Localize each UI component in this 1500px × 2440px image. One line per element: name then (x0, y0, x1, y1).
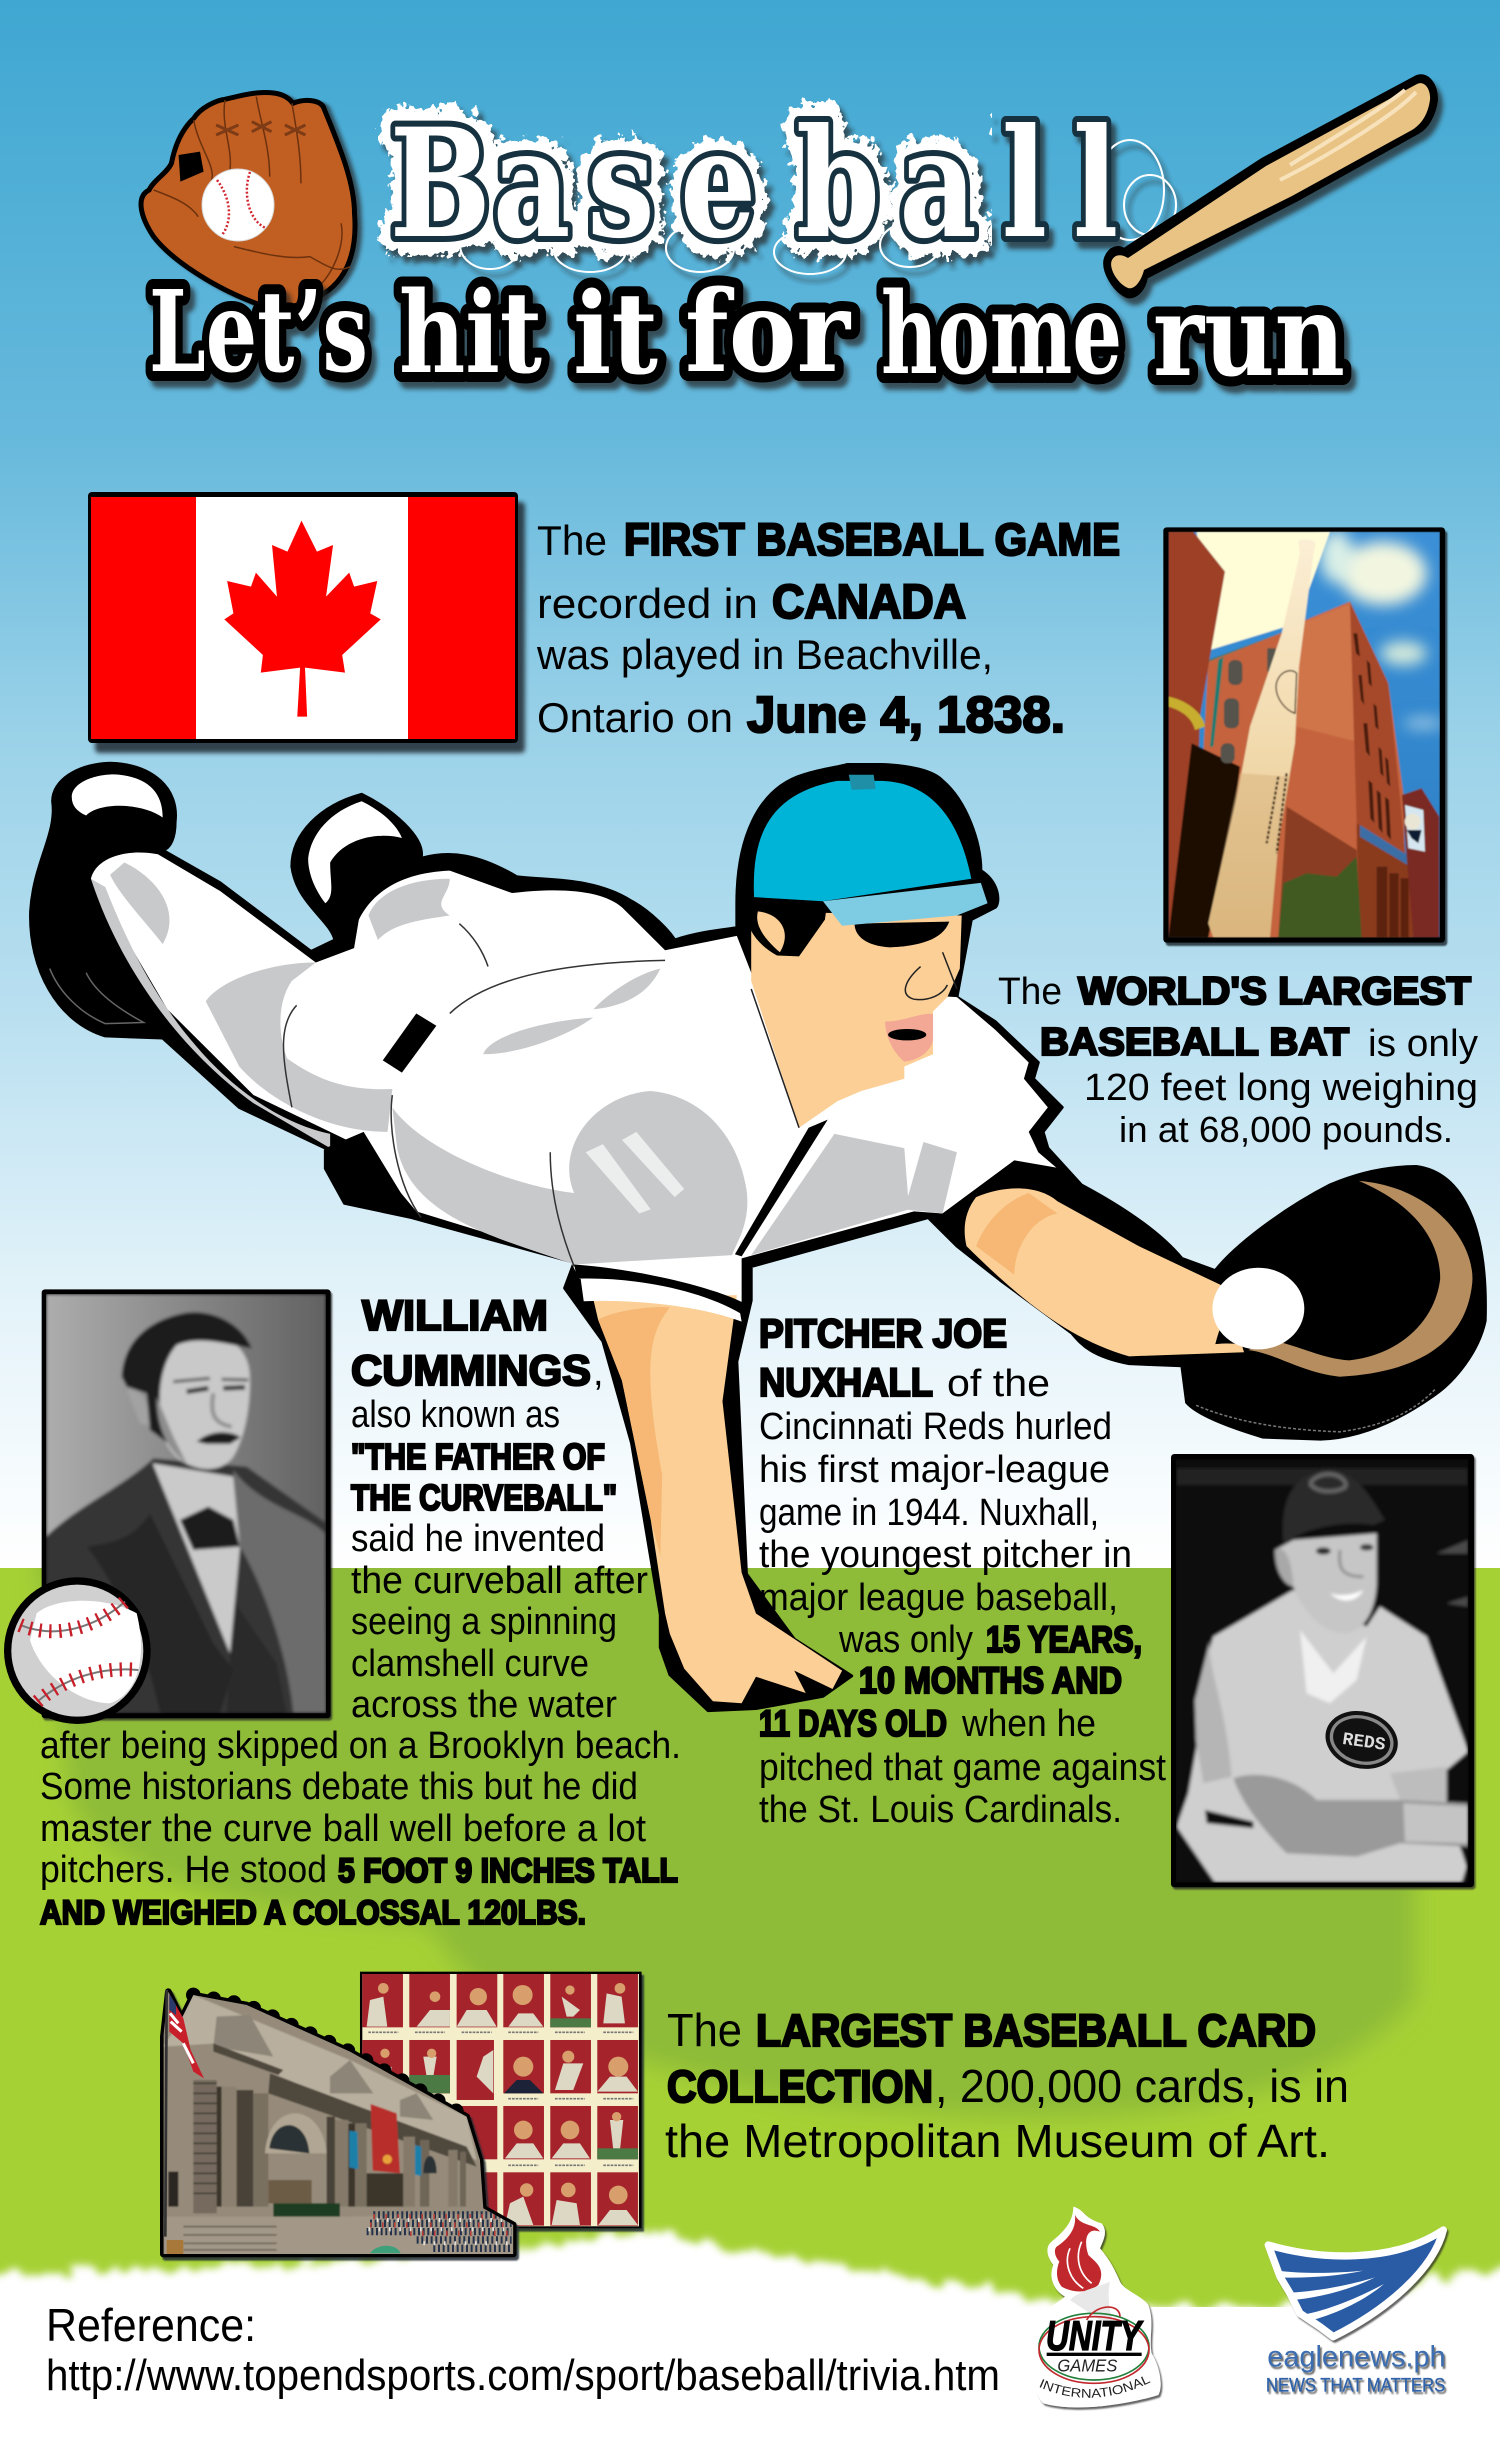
text block: Joe Nuxhall: the St. Louis Cardinals. (759, 1789, 1122, 1831)
subtitle: Let's hit it for home run: hit (399, 268, 542, 399)
text block: world's largest bat: in at 68,000 pounds. (1119, 1109, 1453, 1150)
text block: Joe Nuxhall: of the (947, 1363, 1050, 1405)
text block: William Cummings (40, 1292, 681, 1932)
arm (1233, 1775, 1468, 1857)
text block: William Cummings: Some historians debate this but he did (40, 1766, 638, 1808)
reference: http://www.topendsports.com/sport/baseball/trivia.htm (46, 2351, 1000, 2400)
text block: world's largest bat: 120 feet long weighing (1084, 1067, 1478, 1109)
text block: Joe Nuxhall: NUXHALL (759, 1361, 933, 1405)
text block: Joe Nuxhall: Cincinnati Reds hurled (759, 1406, 1112, 1448)
text block: first baseball game in Canada: The (537, 517, 607, 564)
text block: world's largest bat: BASEBALL BAT (1040, 1021, 1349, 1064)
text block: William Cummings: , (593, 1352, 604, 1394)
text block: Joe Nuxhall: was only (838, 1619, 973, 1661)
text block: William Cummings: 5 FOOT 9 INCHES TALL (338, 1852, 678, 1890)
subtitle: Let's hit it for home run (149, 267, 1345, 402)
subtitle: Let's hit it for home run: run (1153, 271, 1345, 402)
text block: first baseball game in Canada: CANADA (772, 576, 966, 629)
subtitle: Let's hit it for home run: Let’s (149, 267, 368, 398)
ball in fielding glove (1212, 1268, 1304, 1349)
text block: William Cummings: after being skipped on a Brooklyn beach. (40, 1725, 681, 1767)
text block: William Cummings: master the curve ball well before a lot (40, 1808, 646, 1850)
text block: largest card collection: The (667, 2004, 742, 2056)
icon: maple leaf (224, 521, 381, 717)
sleeve cuff (579, 1267, 742, 1322)
player cap (754, 781, 971, 901)
text block: largest card collection: LARGEST BASEBALL CARD (756, 2005, 1316, 2056)
logo: Eagle News: eaglenews.ph (1267, 2341, 1446, 2374)
text block: Joe Nuxhall: 15 YEARS, (986, 1619, 1142, 1660)
text block: Joe Nuxhall: when he (961, 1703, 1096, 1745)
text block: world's largest bat: WORLD'S LARGEST (1078, 970, 1471, 1013)
text block: William Cummings: across the water (351, 1684, 617, 1726)
text block: William Cummings: clamshell curve (351, 1643, 589, 1685)
text block: William Cummings: the curveball after (351, 1560, 648, 1602)
title: Baseball: Baseball (390, 96, 1118, 272)
icon: baseball bat (1105, 76, 1436, 296)
illustration: diving baseball player (31, 763, 1485, 1711)
text block: Joe Nuxhall (759, 1312, 1166, 1831)
text block: first baseball game in Canada: was played in Beachville, (536, 631, 993, 678)
title: Baseball: Baseball (390, 96, 1118, 272)
text block: largest card collection: COLLECTION (667, 2061, 933, 2112)
text block: Joe Nuxhall: 10 MONTHS AND (859, 1660, 1122, 1701)
text block: Joe Nuxhall: pitched that game against (759, 1747, 1166, 1789)
photo: Joe Nuxhall (1171, 1454, 1474, 1887)
subtitle: Let's hit it for home run: home (881, 269, 1122, 400)
reference (46, 2299, 1000, 2400)
sky background (0, 0, 1500, 1568)
text block: world's largest bat (998, 970, 1478, 1150)
icon: baseball glove (141, 92, 355, 308)
text block: Joe Nuxhall: PITCHER JOE (759, 1312, 1007, 1356)
text block: first baseball game in Canada: Ontario on (537, 694, 733, 741)
logo: Unity Games International: UNITY (1046, 2313, 1144, 2359)
text block: Joe Nuxhall: major league baseball, (759, 1577, 1118, 1619)
pants details (325, 1013, 436, 1213)
photo: Joe Nuxhall: REDS (1341, 1730, 1387, 1756)
icon: ball in glove (202, 169, 274, 241)
uniform body (91, 853, 1062, 1303)
grass field (0, 1568, 1500, 2307)
logo: Unity Games International (1038, 2206, 1164, 2411)
title: Baseball: Baseball (390, 96, 1118, 272)
text block: Joe Nuxhall: 11 DAYS OLD (759, 1703, 947, 1744)
text block: largest card collection: the Metropolitan Museum of Art. (665, 2115, 1330, 2167)
reference: Reference: (46, 2299, 256, 2351)
text block: largest card collection: , 200,000 cards, is in (935, 2060, 1349, 2112)
text block: William Cummings: CUMMINGS (351, 1347, 591, 1395)
main arm and hand (593, 1295, 842, 1703)
logo: Unity Games International: GAMES (1057, 2356, 1117, 2376)
icon: baseball (4, 1577, 151, 1724)
subtitle: Let's hit it for home run: it (573, 269, 658, 400)
text block: world's largest bat: The (998, 971, 1062, 1013)
text block: William Cummings: WILLIAM (362, 1292, 548, 1340)
head (1275, 1533, 1377, 1633)
fielding glove (1196, 1179, 1472, 1432)
subtitle: Let's hit it for home run: for (685, 267, 852, 398)
photo: Metropolitan Museum of Art (163, 1990, 517, 2257)
jersey (1177, 1590, 1468, 1883)
text block: William Cummings: said he invented (351, 1518, 605, 1560)
text block: William Cummings: pitchers. He stood (40, 1849, 327, 1891)
back shoe (72, 774, 163, 818)
text block: Joe Nuxhall: his first major-league (759, 1449, 1110, 1491)
text block: William Cummings: "THE FATHER OF (351, 1436, 605, 1477)
logo: Eagle News: NEWS THAT MATTERS (1266, 2376, 1445, 2397)
uniform shading (91, 862, 957, 1264)
text block: William Cummings: THE CURVEBALL" (351, 1477, 617, 1518)
text block: William Cummings: AND WEIGHED A COLOSSAL 120LBS. (40, 1894, 586, 1932)
text block: first baseball game in Canada: FIRST BASEBALL GAME (624, 514, 1120, 565)
text block: largest card collection (665, 2004, 1349, 2167)
logo: Unity Games International: INTERNATIONAL (1040, 2376, 1150, 2398)
text block: Joe Nuxhall: the youngest pitcher in (759, 1534, 1132, 1576)
right arm (965, 1188, 1244, 1356)
panel: Canadian flag (88, 492, 518, 743)
player outline (31, 763, 1485, 1711)
logo: Eagle News (1266, 2230, 1446, 2397)
player head (747, 775, 988, 1128)
icon: American flag (169, 1993, 204, 2078)
jersey badge (1326, 1711, 1398, 1769)
photo: William Cummings portrait (42, 1289, 331, 1718)
text block: first baseball game in Canada: recorded in (537, 580, 758, 627)
text block: Joe Nuxhall: game in 1944. Nuxhall, (759, 1492, 1099, 1534)
text block: first baseball game in Canada: June 4, 1838. (747, 686, 1065, 743)
text block: first baseball game in Canada (536, 514, 1120, 743)
text block: William Cummings: also known as (351, 1394, 560, 1436)
photo: giant bat museum (1163, 527, 1445, 943)
photo: baseball card sheet (360, 1972, 642, 2228)
text block: William Cummings: seeing a spinning (351, 1601, 617, 1643)
text block: world's largest bat: is only (1368, 1023, 1478, 1065)
